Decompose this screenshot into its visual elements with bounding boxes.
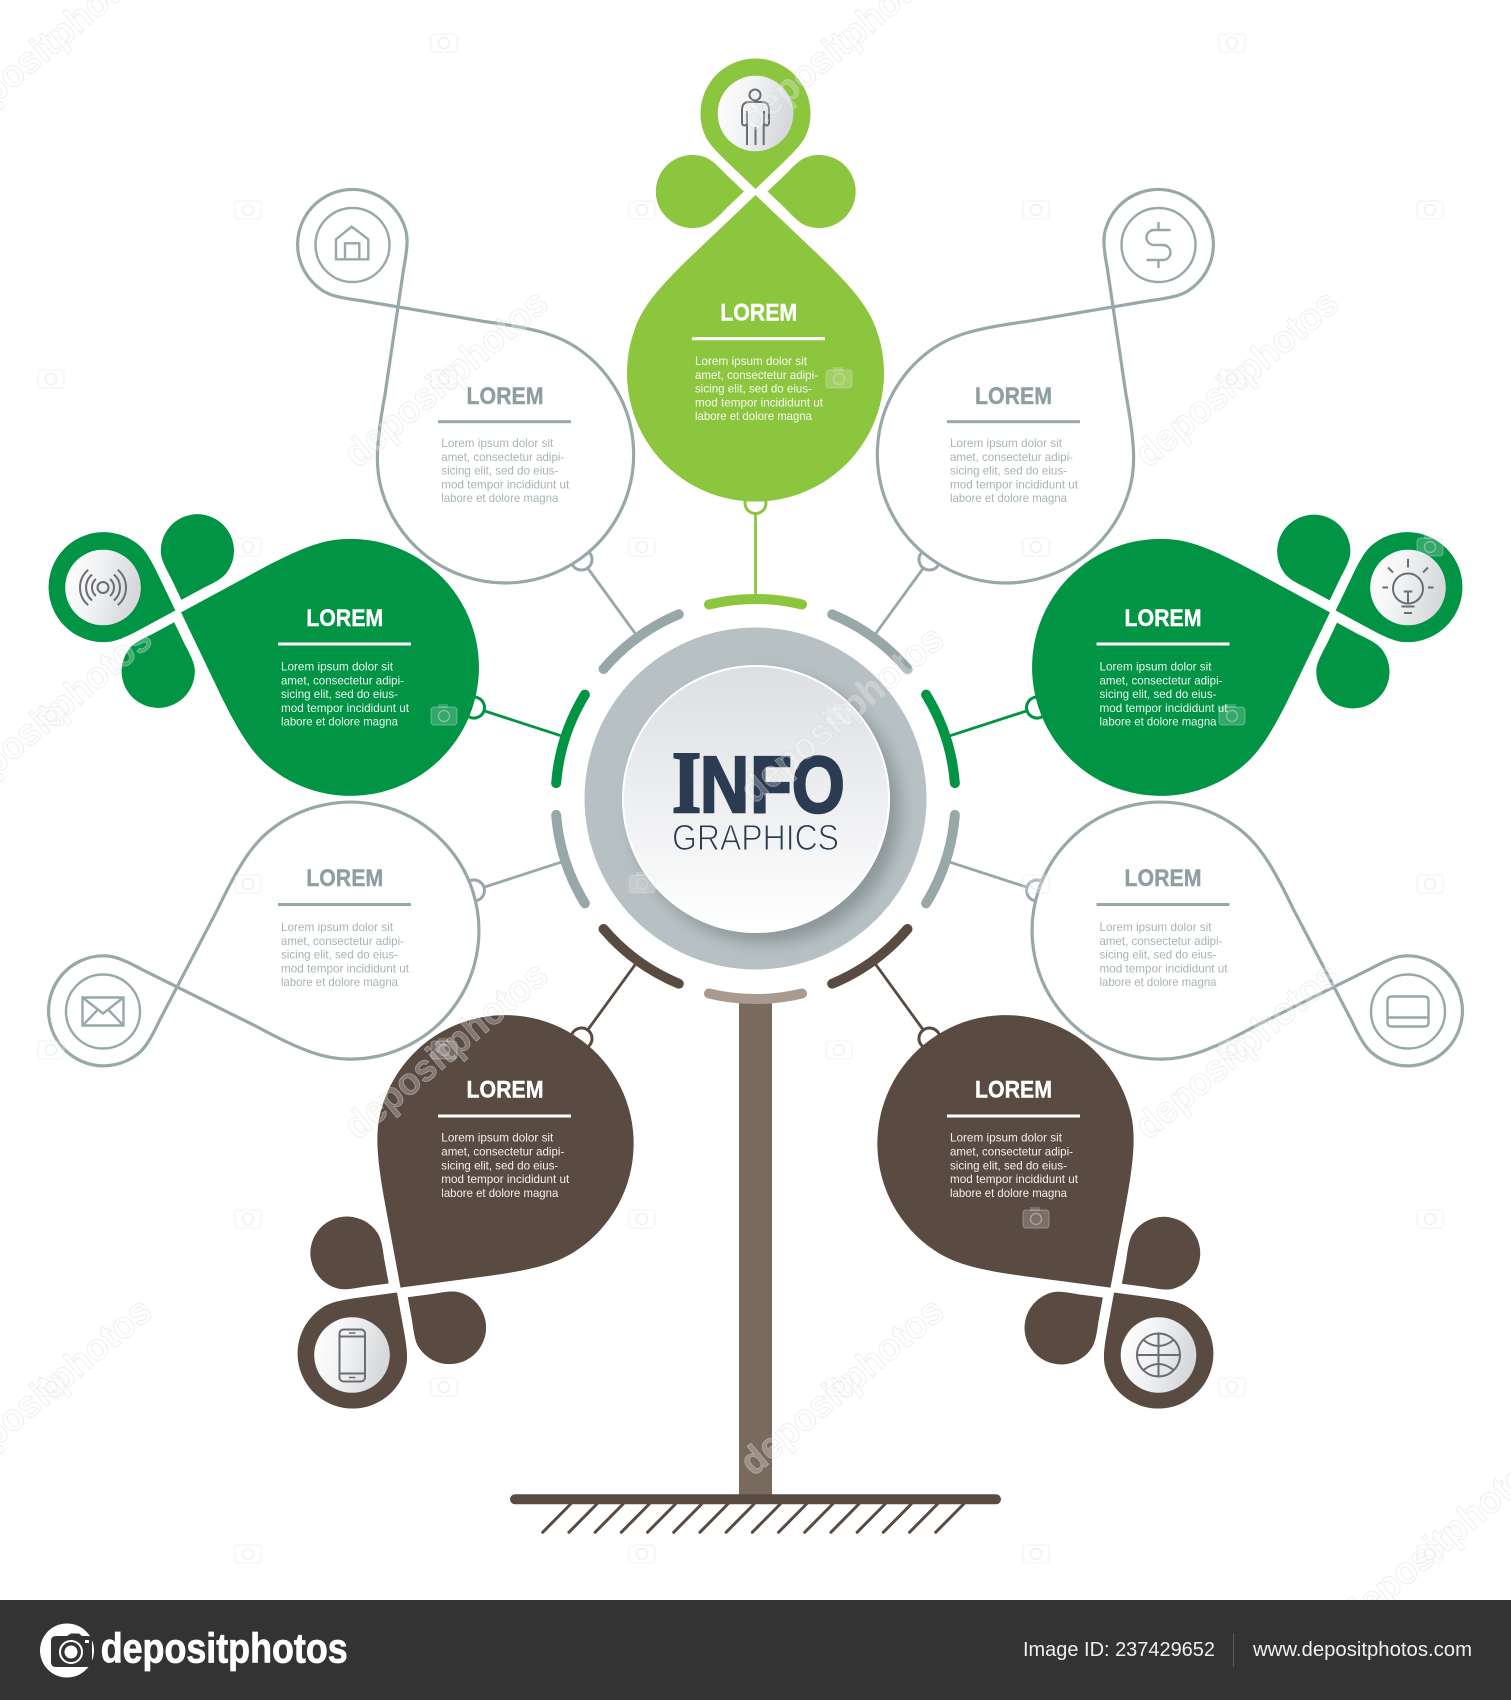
text block: upper-right: labore et dolore magna [950, 492, 1068, 505]
text block: upper-left: Lorem ipsum dolor sit [441, 437, 554, 450]
icon: tablet [1388, 996, 1428, 1026]
watermark: depositphotos [1127, 282, 1347, 476]
text block: right green: sicing elit, sed do eius- [1100, 688, 1217, 701]
text block: upper-left: mod tempor incididunt ut [441, 478, 570, 491]
text block: lower-right: Lorem ipsum dolor sit [1100, 921, 1212, 934]
text block: top: sicing elit, sed do eius- [695, 383, 812, 396]
subtitle: GRAPHICS: GRAPHICS [672, 817, 839, 858]
text block: lower-left brown [441, 1132, 570, 1200]
watermark: depositphotos [336, 282, 556, 476]
central hub disc [584, 628, 926, 970]
text block: top: amet, consectetur adipi- [695, 369, 818, 382]
text block: left green: mod tempor incididunt ut [281, 702, 410, 715]
heading: lower-right brown: LOREM [975, 1076, 1052, 1103]
panel: left green branch (signal) [12, 448, 585, 829]
heading: lower-left: LOREM [306, 865, 383, 892]
ground line with hatching [510, 1494, 1001, 1532]
title: INFO: N [700, 740, 749, 829]
text block: lower-left: mod tempor incididunt ut [281, 962, 410, 975]
text block: upper-right: amet, consectetur adipi- [950, 451, 1073, 464]
heading: upper-right: LOREM [975, 383, 1052, 410]
text block: upper-left: sicing elit, sed do eius- [441, 465, 558, 478]
text block: lower-right: sicing elit, sed do eius- [1100, 949, 1217, 962]
text block: left green: sicing elit, sed do eius- [281, 688, 398, 701]
text block: lower-right brown: Lorem ipsum dolor sit [950, 1132, 1063, 1145]
panel: lower-left outline branch (mail) [12, 769, 585, 1150]
heading: upper-left: LOREM [466, 383, 544, 410]
icon: logo camera [40, 1624, 94, 1678]
title: INFO: O [792, 740, 845, 829]
text block: lower-right [1100, 921, 1228, 989]
text block: lower-right brown: sicing elit, sed do eius- [950, 1159, 1067, 1172]
text block: lower-left brown: labore et dolore magna [441, 1187, 559, 1200]
icon: envelope [82, 998, 124, 1026]
text block: lower-right: mod tempor incididunt ut [1100, 962, 1228, 975]
text block: lower-right brown [950, 1132, 1079, 1200]
text block: lower-left brown: Lorem ipsum dolor sit [441, 1132, 554, 1145]
icon: smartphone [340, 1330, 365, 1382]
text block: lower-right brown: mod tempor incididunt ut [950, 1173, 1079, 1186]
watermark: depositphotos [1127, 954, 1347, 1148]
text block: right green: mod tempor incididunt ut [1100, 702, 1228, 715]
icon: basketball [1137, 1334, 1180, 1376]
text block: lower-left brown: amet, consectetur adipi- [441, 1146, 564, 1158]
text block: top: labore et dolore magna [695, 410, 813, 423]
text block: right green: Lorem ipsum dolor sit [1100, 660, 1212, 674]
heading: right green: LOREM [1124, 605, 1202, 632]
text block: top: mod tempor incididunt ut [695, 396, 824, 409]
text block: upper-right [950, 437, 1079, 505]
heading: top: LOREM [720, 300, 797, 326]
panel: upper-left outline branch (home) [216, 124, 685, 669]
icon: dollar sign [1146, 222, 1170, 268]
watermark: depositphotos [336, 954, 556, 1148]
text block: lower-right: amet, consectetur adipi- [1100, 935, 1223, 948]
panel: lower-left brown branch (phone) [216, 929, 685, 1474]
icon: house [336, 227, 368, 259]
tree trunk with top cap [709, 994, 802, 1498]
heading: left green: LOREM [306, 605, 383, 632]
text block: lower-right: labore et dolore magna [1100, 976, 1217, 989]
footer bar [0, 1600, 1511, 1700]
watermark: depositphotos [732, 1290, 952, 1484]
text block: upper-left: labore et dolore magna [441, 492, 559, 505]
heading: lower-right: LOREM [1124, 865, 1202, 892]
panel: lower-right outline branch (tablet) [926, 769, 1499, 1150]
title: INFO: I [672, 733, 701, 831]
heading: lower-left brown: LOREM [466, 1076, 544, 1103]
text block: lower-left: labore et dolore magna [281, 976, 399, 989]
website url: www.depositphotos.com [1252, 1639, 1472, 1661]
text block: lower-left [281, 921, 410, 989]
icon: light bulb [1382, 559, 1434, 613]
text block: lower-left brown: mod tempor incididunt ut [441, 1173, 570, 1186]
image id: Image ID: 237429652 [1023, 1639, 1215, 1661]
text block: upper-left: amet, consectetur adipi- [441, 451, 564, 464]
text block: lower-right brown: amet, consectetur adipi- [950, 1146, 1073, 1158]
text block: top [695, 355, 824, 423]
text block: lower-left: sicing elit, sed do eius- [281, 949, 398, 962]
icon: person [742, 90, 769, 145]
text block: lower-left brown: sicing elit, sed do eius- [441, 1159, 558, 1172]
watermark: depositphotos [732, 618, 952, 812]
text block: left green [281, 660, 410, 729]
icon: signal waves [80, 570, 126, 605]
panel: upper-right outline branch (money) [826, 124, 1295, 669]
text block: right green: amet, consectetur adipi- [1100, 674, 1223, 687]
text block: lower-right brown: labore et dolore magna [950, 1187, 1068, 1200]
text block: lower-left: amet, consectetur adipi- [281, 935, 404, 948]
text block: upper-right: mod tempor incididunt ut [950, 478, 1079, 491]
logo wordmark: depositphotos [101, 1625, 348, 1672]
text block: left green: labore et dolore magna [281, 716, 399, 729]
text block: right green: labore et dolore magna [1100, 716, 1217, 729]
text block: right green [1100, 660, 1228, 729]
title: INFO: F [750, 740, 792, 829]
text block: upper-right: sicing elit, sed do eius- [950, 465, 1067, 478]
text block: upper-right: Lorem ipsum dolor sit [950, 437, 1063, 450]
panel: right green branch (idea) [926, 448, 1499, 829]
text block: lower-left: Lorem ipsum dolor sit [281, 921, 394, 934]
text block: left green: Lorem ipsum dolor sit [281, 660, 394, 674]
text block: left green: amet, consectetur adipi- [281, 674, 404, 687]
panel: top light-green branch (person) [627, 59, 884, 605]
text block: top: Lorem ipsum dolor sit [695, 355, 808, 368]
panel: lower-right brown branch (ball) [826, 929, 1295, 1474]
text block: upper-left [441, 437, 570, 505]
